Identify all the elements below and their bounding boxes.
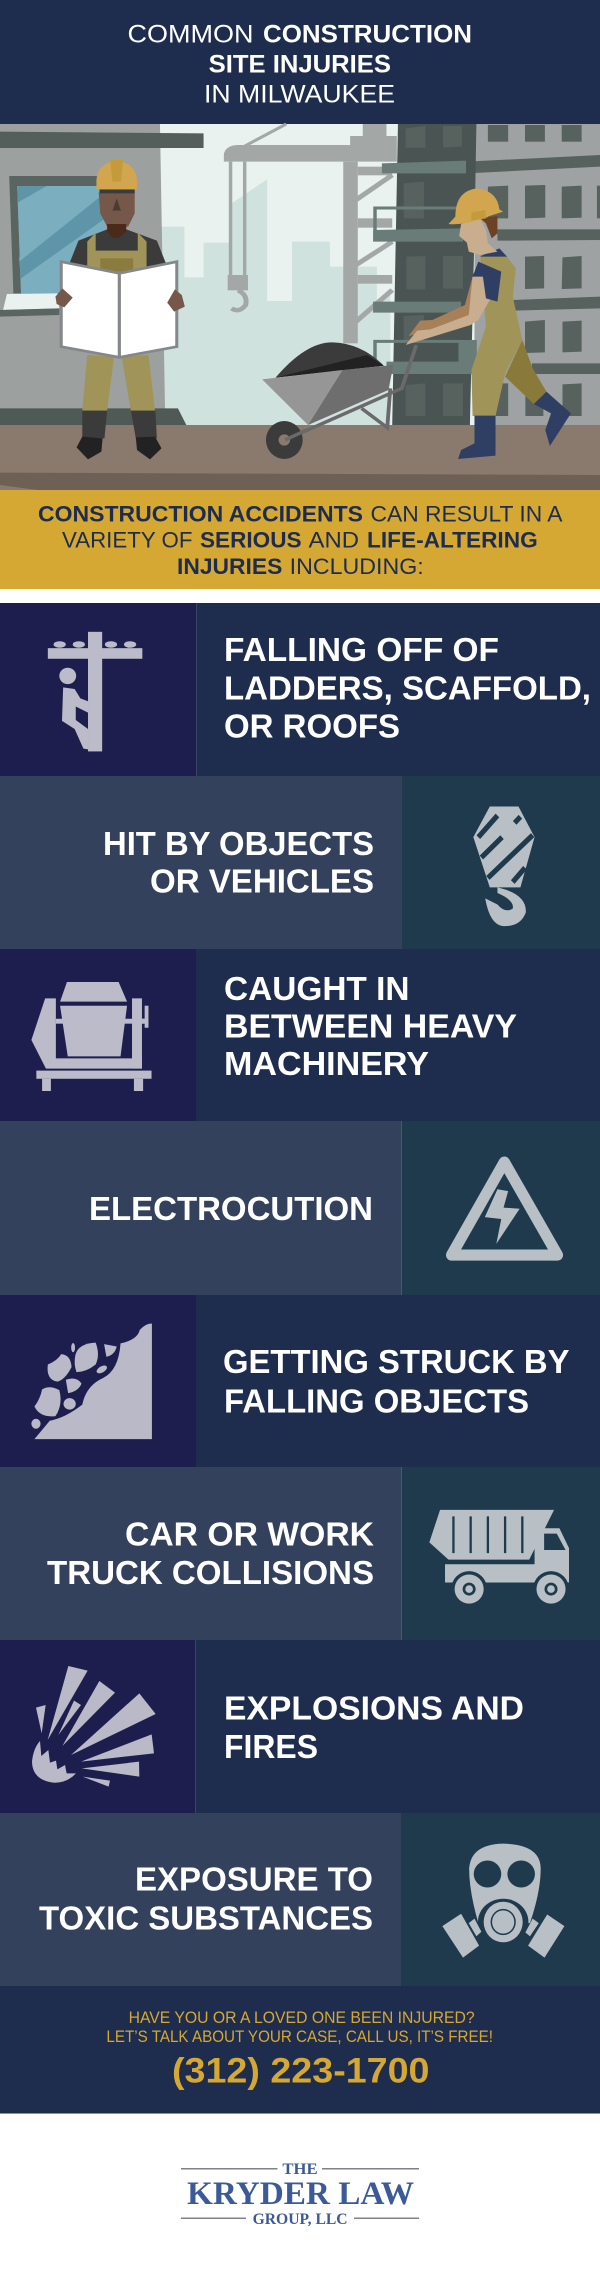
row 8: toxic substances: EXPOSURE TO xyxy=(135,1860,373,1898)
worker pushing wheelbarrow xyxy=(406,188,571,459)
icon: explosion xyxy=(32,1666,156,1787)
call to action footer xyxy=(0,1986,600,2114)
row 5: struck by falling objects: FALLING OBJECTS xyxy=(224,1382,529,1420)
row 3: caught in machinery: CAUGHT IN xyxy=(224,970,410,1007)
left building xyxy=(0,124,204,425)
illustration: construction site with two workers xyxy=(0,124,600,491)
call to action footer: HAVE YOU OR A LOVED ONE BEEN INJURED? xyxy=(129,2009,475,2027)
row 7: explosions and fires: EXPLOSIONS AND xyxy=(224,1690,524,1726)
row 2: hit by objects xyxy=(0,776,600,949)
law firm logo: THE xyxy=(282,2161,318,2178)
row 6: truck collisions xyxy=(0,1467,600,1640)
row 6: truck collisions: CAR OR WORK xyxy=(125,1516,374,1552)
row 4: electrocution xyxy=(0,1121,600,1295)
wheelbarrow xyxy=(262,342,416,459)
row 8: toxic substances xyxy=(0,1813,600,1986)
row 3: caught in machinery: BETWEEN HEAVY xyxy=(224,1008,517,1044)
row 5: struck by falling objects: GETTING STRUCK BY xyxy=(223,1343,570,1380)
intro banner: AND xyxy=(308,527,359,552)
icon: crane hook xyxy=(473,807,535,926)
row 6: truck collisions: TRUCK COLLISIONS xyxy=(47,1554,374,1591)
row 4: electrocution: ELECTROCUTION xyxy=(89,1190,373,1227)
call to action footer: (312) 223-1700 xyxy=(172,2052,430,2090)
law firm logo: KRYDER LAW xyxy=(187,2176,414,2212)
row 7: explosions and fires: FIRES xyxy=(224,1728,318,1765)
intro banner: INCLUDING: xyxy=(290,554,424,579)
tower crane with hook xyxy=(224,124,397,343)
intro banner xyxy=(0,490,600,589)
law firm logo xyxy=(181,2161,419,2228)
row 2: hit by objects: HIT BY OBJECTS xyxy=(103,825,374,862)
row 3: caught in machinery: MACHINERY xyxy=(224,1045,429,1082)
row 5: struck by falling objects xyxy=(0,1295,600,1467)
row 3: caught in machinery xyxy=(0,949,600,1121)
icon: dump truck xyxy=(429,1510,569,1607)
worker reading blueprint xyxy=(55,160,185,459)
row 1: falls xyxy=(0,603,600,776)
row 1: falls: FALLING OFF OF xyxy=(224,631,499,668)
intro banner: VARIETY OF xyxy=(62,527,192,552)
intro banner: CAN RESULT IN A xyxy=(370,502,563,527)
right building with windows xyxy=(466,124,600,425)
title panel: CONSTRUCTION xyxy=(263,20,472,48)
title panel: IN MILWAUKEE xyxy=(204,80,395,108)
intro banner: SERIOUS xyxy=(200,527,302,552)
ground xyxy=(0,425,600,491)
icon: gas mask xyxy=(442,1844,564,1958)
title panel xyxy=(0,0,600,124)
icon: high voltage warning xyxy=(452,1162,558,1255)
intro banner: CONSTRUCTION ACCIDENTS xyxy=(38,502,363,527)
intro banner: LIFE-ALTERING xyxy=(367,527,538,552)
law firm logo: GROUP, LLC xyxy=(253,2211,348,2228)
icon: rockslide xyxy=(31,1324,152,1439)
central tower with beams xyxy=(373,124,477,425)
row 1: falls: LADDERS, SCAFFOLD, xyxy=(224,670,591,706)
icon: cement mixer xyxy=(31,982,152,1091)
row 8: toxic substances: TOXIC SUBSTANCES xyxy=(39,1900,373,1936)
row 1: falls: OR ROOFS xyxy=(224,708,400,744)
row 7: explosions and fires xyxy=(0,1640,600,1813)
call to action footer: LET’S TALK ABOUT YOUR CASE, CALL US, IT’S FREE! xyxy=(106,2028,493,2046)
title panel: COMMON xyxy=(128,20,254,48)
title panel: SITE INJURIES xyxy=(209,50,391,78)
icon: worker climbing utility pole xyxy=(48,632,142,751)
intro banner: INJURIES xyxy=(177,554,282,579)
row 2: hit by objects: OR VEHICLES xyxy=(150,862,374,900)
